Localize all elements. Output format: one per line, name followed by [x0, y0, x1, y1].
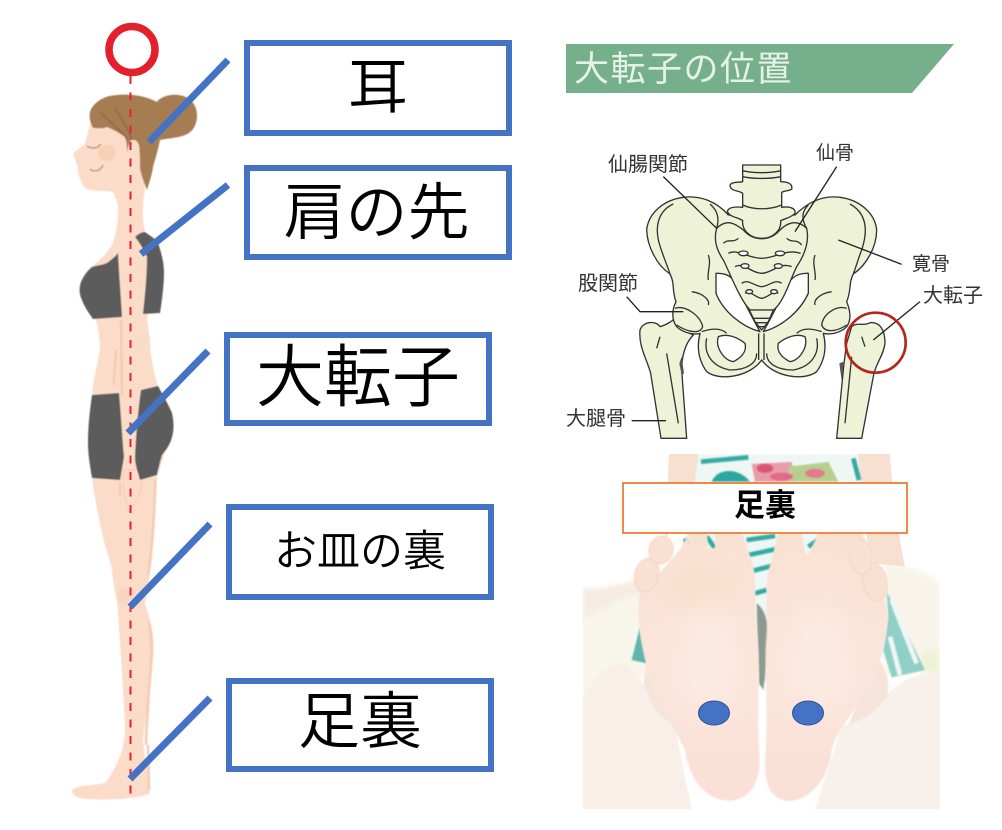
hip joint arcs	[675, 308, 847, 332]
warm ball-of-foot tint	[680, 578, 719, 598]
cheek	[98, 145, 116, 161]
shorts front	[88, 393, 124, 480]
hand	[123, 470, 142, 512]
leader lines	[627, 167, 920, 421]
body skin	[72, 118, 172, 800]
green banner heading: 大転子の位置	[574, 50, 793, 89]
sports top back	[135, 232, 164, 314]
right foot	[765, 533, 887, 801]
teal side panel right	[883, 592, 925, 677]
label box: greater trochanter	[227, 335, 489, 423]
shirt teal stripes	[632, 457, 925, 677]
photo background	[582, 454, 940, 809]
right femur	[837, 323, 885, 438]
label: hip joint: 股関節	[578, 272, 638, 295]
label box: ear: 耳	[348, 54, 408, 121]
teal panel left	[632, 627, 647, 663]
pelvis diagram	[566, 142, 983, 438]
label: sacroiliac joint: 仙腸関節	[608, 153, 688, 176]
pointer line: ear	[149, 60, 228, 142]
sports top front	[80, 253, 122, 319]
ear	[131, 140, 140, 160]
sacral foramina	[739, 251, 785, 294]
label box: sole	[229, 681, 491, 769]
green banner heading	[566, 44, 954, 93]
hair	[90, 95, 197, 190]
skin shading	[114, 320, 155, 790]
label box: sole: 足裏	[298, 688, 422, 757]
light arch highlights	[678, 600, 738, 713]
blue marker: right heel	[792, 701, 824, 725]
label: sacrum: 仙骨	[816, 142, 854, 164]
shorts shadow between feet	[757, 603, 769, 690]
pointer line: back of knee	[130, 524, 210, 607]
label box: ear	[247, 43, 509, 133]
left foot toes	[633, 557, 660, 592]
woman side-view figure	[72, 95, 197, 800]
closed eye and smile	[87, 144, 103, 171]
shorts back	[135, 386, 174, 480]
knee shading	[117, 587, 129, 603]
pointer line: sole	[130, 698, 210, 779]
pointer line: shoulder	[141, 185, 228, 254]
shirt	[682, 454, 925, 682]
photo of soles of feet	[582, 454, 940, 809]
label box: shoulder tip: 肩の先	[283, 179, 470, 248]
pelvis bones	[627, 165, 920, 438]
caption box: sole	[623, 483, 907, 533]
label: greater trochanter: 大転子	[923, 284, 983, 307]
bone contour details	[657, 204, 865, 423]
red dashed plumb line	[130, 76, 132, 802]
lumbar vertebrae	[727, 165, 795, 238]
label: femur: 大腿骨	[566, 407, 626, 430]
femur lens shadows	[679, 357, 843, 383]
hip bones	[647, 197, 877, 377]
label: ilium: 寛骨	[912, 253, 950, 275]
left femur	[640, 318, 693, 438]
pointer line: greater trochanter	[128, 351, 208, 433]
teal dome	[712, 471, 750, 482]
label box: greater trochanter: 大転子	[256, 340, 460, 416]
left foot	[631, 533, 891, 801]
caption box: sole: 足裏	[734, 488, 796, 523]
obturator holes	[718, 335, 806, 362]
coccyx	[749, 310, 773, 330]
pelvic opening	[716, 273, 808, 332]
arms	[665, 454, 905, 567]
red circle above head	[109, 26, 155, 72]
sacrum	[715, 223, 808, 310]
shirt floral pattern	[752, 462, 795, 482]
right foot toes	[862, 562, 888, 602]
blue marker: left heel	[698, 701, 730, 725]
label box: shoulder tip	[247, 168, 509, 257]
soft cushions	[582, 563, 940, 697]
label box: back of knee	[229, 507, 491, 597]
legs	[582, 657, 940, 809]
red highlight circle	[846, 313, 906, 373]
pubic symphysis	[759, 333, 764, 360]
label box: back of knee: お皿の裏	[274, 528, 446, 576]
